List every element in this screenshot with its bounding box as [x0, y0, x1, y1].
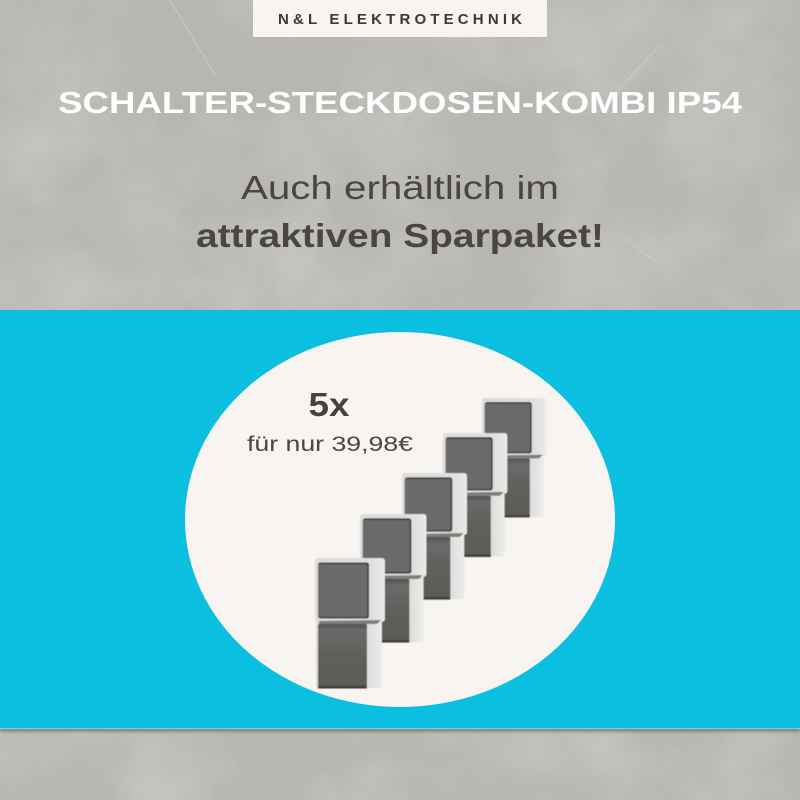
unit 2	[360, 514, 426, 643]
price: für nur 39,98€	[247, 433, 413, 456]
unit 4	[443, 433, 507, 557]
brand tag	[253, 0, 547, 37]
product image: five switch-socket units	[315, 398, 546, 688]
subtitle: Auch erhältlich im	[241, 169, 559, 206]
subtitle: attraktiven Sparpaket!	[196, 217, 604, 254]
subtitle	[196, 169, 604, 254]
quantity: 5x: 5x	[308, 386, 350, 423]
title: SCHALTER-STECKDOSEN-KOMBI IP54	[58, 85, 743, 120]
cream ellipse panel	[185, 332, 615, 707]
brand tag: N&L ELEKTROTECHNIK	[278, 11, 522, 28]
unit 1	[315, 558, 385, 688]
blue band	[0, 310, 800, 732]
unit 3	[402, 473, 467, 600]
unit 5	[482, 398, 546, 517]
